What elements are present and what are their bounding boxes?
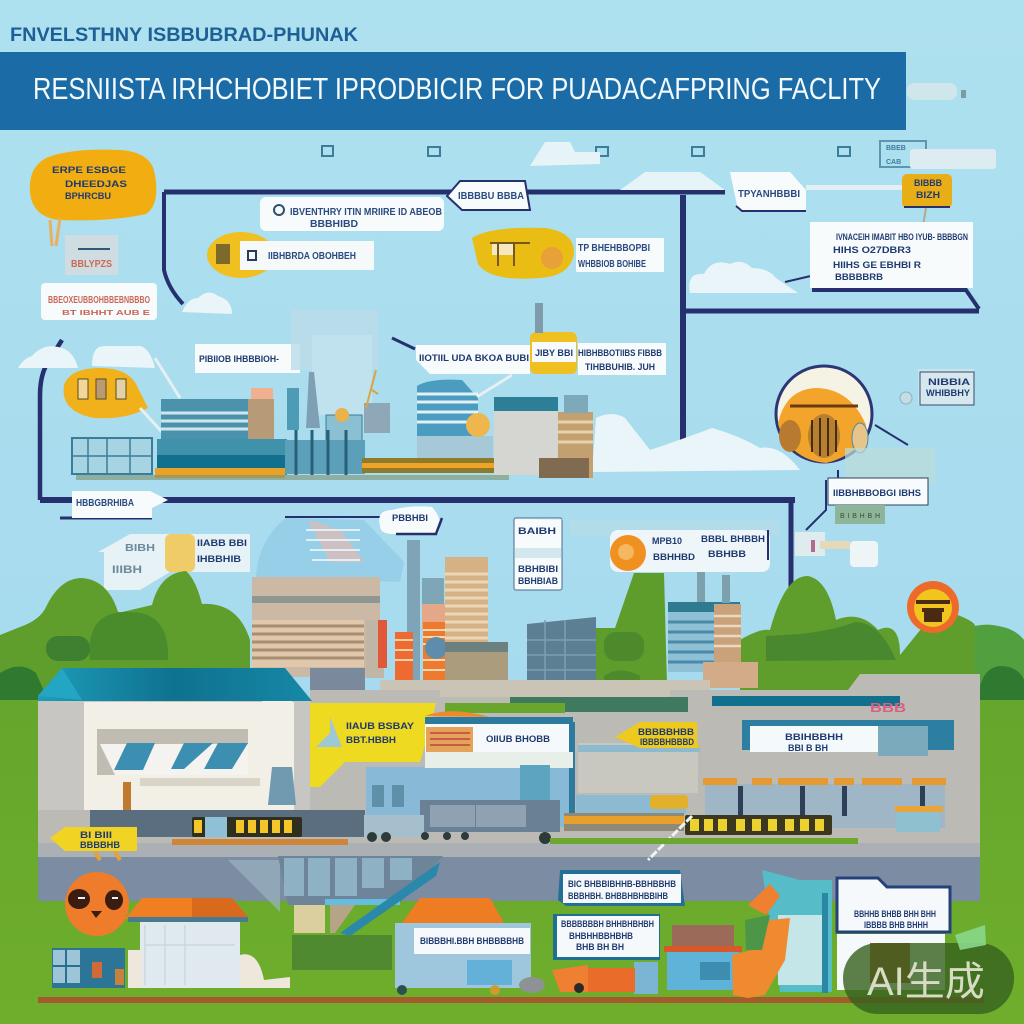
- callout: middle three-part label: TIHBBUHIB. JUH: [585, 362, 655, 372]
- callout: orange icon label: MPB10: [652, 536, 682, 546]
- faded glass dome with stripes: [256, 518, 404, 582]
- note box lower bottom centre: [553, 914, 660, 960]
- green strip below hall: [550, 838, 858, 844]
- diagonal pointers: [140, 358, 512, 432]
- callout: faded yellow label left: IIABB BBI: [197, 538, 247, 548]
- grey bin: [268, 767, 296, 805]
- callout: yellow blob with label: [207, 232, 374, 278]
- middle hall with yellow arrow: BBBBBHBB: [638, 727, 695, 737]
- billboard right hall: BBIHBBHH: [785, 732, 843, 742]
- callout: orange blob top left: ERPE ESBGE: [52, 165, 126, 175]
- blue glass warehouse: [366, 711, 575, 827]
- callout: faded yellow label left: IHBBHIB: [197, 554, 242, 564]
- towers and pipes centre: [285, 370, 390, 475]
- orange truck: [519, 962, 658, 994]
- small kiosk: [895, 806, 943, 812]
- centre blue van house: BIBBBHI.BBH BHBBBBHB: [420, 936, 524, 946]
- watermark text: AI生成: [867, 960, 985, 1004]
- callout: middle three-part label: HIBHBBOTIIBS FIBBB: [578, 348, 662, 358]
- right glass and tan tower: [668, 572, 758, 688]
- ground: [0, 700, 1024, 1024]
- label: factory heading: [195, 344, 300, 373]
- callout: middle three-part label: IIOTIIL UDA BKOA BUBI: [419, 353, 529, 363]
- white folder panel: IBBBB BHB BHHH: [864, 920, 928, 930]
- panel: white note right: HIHS O27DBR3: [833, 245, 911, 255]
- glass enclosure left: [72, 438, 152, 474]
- orange platform: [564, 795, 686, 831]
- yellow callout above train: BBT.HBBH: [346, 735, 396, 745]
- small blue shop: [664, 925, 742, 990]
- icon: orange owl ball: [65, 872, 129, 936]
- chimney top: [535, 303, 543, 333]
- bottom brown ground line: [38, 997, 984, 1003]
- callout: tag right of top line: [730, 172, 806, 211]
- glass blue building: [527, 617, 596, 686]
- note box lower bottom centre: BHBHHBBHBHB: [569, 931, 633, 941]
- colonnade with orange canopies: [703, 778, 946, 832]
- factory base shadow: [76, 475, 509, 480]
- worker figure: [123, 782, 131, 810]
- panel: top right mini card: CAB: [886, 159, 901, 166]
- label: right lower with green plate: BIBHBH: [840, 513, 880, 520]
- solar panels: [114, 743, 248, 770]
- callout: yellow blob with label: IIBHBRDA OBOHBEH: [268, 251, 356, 262]
- icon: sun badge: [907, 581, 959, 633]
- windows recess: [97, 729, 248, 775]
- line above label: [515, 519, 780, 535]
- right tiny card: WHIBBHY: [926, 388, 970, 398]
- label: cloud tag centre: PBBHBI: [392, 513, 428, 523]
- panel: white note right: IVNACEIH IMABIT HBO IYUB- BBBBGN: [836, 232, 968, 242]
- tower pillar: [407, 540, 420, 680]
- yellow callout above train: IIAUB BSBAY: [346, 721, 414, 731]
- panel: white note right: BBBBBRB: [835, 272, 884, 282]
- panel: white note right: HIIHS GE EBHBI R: [833, 260, 922, 270]
- label: arrow tag lower left: HBBGBRHIBA: [76, 498, 134, 509]
- callout: orange icon label: [610, 530, 770, 572]
- cloud band along top connector: [530, 142, 725, 190]
- main plant block: [155, 388, 287, 478]
- panel: white note right: [810, 222, 973, 288]
- callout: orange blob top left: [30, 150, 156, 246]
- flow connector lines: [40, 192, 979, 590]
- factory stack haze: [291, 310, 378, 415]
- yellow arrow sign: [50, 827, 137, 860]
- icon: circular magnifier face: [776, 366, 872, 463]
- label: narrow two-part card: BBHBIBI: [518, 564, 558, 574]
- panel: top right mini card: BBEB: [886, 145, 906, 152]
- label: right lower with green plate: [828, 448, 935, 524]
- callout: arrow tag top centre: [447, 181, 530, 210]
- label: red text box: BBEOXEUBBOHBBEBNBBBO: [48, 295, 150, 306]
- callout: orange icon label: BBHHBD: [653, 552, 696, 562]
- callout: faded yellow label left: BIBH: [125, 543, 155, 554]
- middle hall with yellow arrow: [578, 722, 700, 809]
- lower ledge: [140, 778, 260, 786]
- city skyline: [252, 540, 758, 698]
- billboard right hall: [742, 700, 954, 756]
- orange track strip: [172, 839, 348, 845]
- tiered building: [362, 380, 509, 473]
- callout: faded yellow label left: [98, 534, 250, 590]
- label: narrow two-part card: BBHBIAB: [518, 576, 558, 586]
- panel: top right mini card: [880, 141, 996, 169]
- yellow callout above train: [310, 703, 436, 787]
- white folder panel: BBHHB BHBB BHH BHH: [854, 909, 936, 919]
- watermark pill: [843, 925, 1014, 1014]
- yellow train left: [192, 817, 302, 837]
- road: [38, 843, 980, 901]
- label: narrow two-part card: BAIBH: [518, 526, 556, 536]
- callout: yellow tag: BIZH: [916, 190, 940, 200]
- callout: middle three-part label: JIBY BBI: [535, 348, 573, 358]
- callout: yellow badge centre: WHBBIOB BOHIBE: [578, 259, 646, 270]
- small window icons row: [322, 146, 850, 156]
- clouds: [18, 262, 800, 472]
- note box lower bottom centre: BHB BH BH: [576, 942, 624, 952]
- callout: yellow badge centre: [472, 228, 664, 279]
- small capsule top right: [907, 83, 966, 100]
- billboard right hall: BBB: [870, 700, 906, 715]
- teal tower with orange tree: [732, 870, 832, 998]
- callout: orange blob top left: DHEEDJAS: [65, 179, 127, 189]
- centre blue van house: [395, 898, 531, 995]
- title banner: [0, 52, 906, 130]
- right tan building: [494, 395, 593, 478]
- right tiny card: NIBBIA: [928, 377, 971, 387]
- underpass glass structure: [228, 856, 443, 970]
- small sign board: [65, 235, 118, 275]
- dashed white pointer: [648, 816, 692, 860]
- large tan building: [252, 577, 387, 678]
- roof: [38, 668, 312, 701]
- label: top middle two-line: BBBHIBD: [310, 219, 358, 230]
- note box upper bottom centre: BIC BHBBIBHHB-BBHBBHB: [568, 879, 676, 889]
- label: red text box: [41, 283, 157, 320]
- label: red text box: BT IBHHT AUB E: [62, 310, 150, 317]
- callout: yellow tag: [902, 174, 952, 226]
- rail line wall: [90, 810, 365, 837]
- orange striped towers: [395, 578, 447, 686]
- connector: pale strip to badge: [806, 185, 906, 190]
- callout: faded yellow label left: IIIBH: [112, 564, 142, 576]
- label: top middle two-line: [260, 197, 444, 231]
- callout: yellow blob with worker icons: [64, 368, 148, 418]
- callout: yellow tag: BIBBB: [914, 178, 942, 188]
- sky background: [0, 0, 1024, 720]
- callout: arrow tag top centre: IBBBBU BBBA: [458, 191, 524, 202]
- kicker heading: FNVELSTHNY ISBBUBRAD-PHUNAK: [10, 25, 358, 46]
- label: cloud tag centre: [379, 506, 442, 534]
- billboard right hall: BBI B BH: [788, 743, 828, 753]
- label: top middle two-line: IBVENTHRY ITIN MRIIRE ID ABEOB: [290, 207, 442, 218]
- callout: yellow badge centre: TP BHEHBBOPBI: [578, 243, 650, 254]
- yellow arrow sign: BI BIII: [80, 830, 112, 840]
- grey freight truck: [364, 800, 560, 844]
- white folder panel: [837, 878, 950, 990]
- label: narrow two-part card: [514, 518, 562, 590]
- callout: orange icon label: BBBL BHBBH: [701, 534, 765, 544]
- left bottom house: [125, 898, 290, 988]
- small sign board: BBLYPZS: [71, 259, 112, 270]
- left bottom kiosk: [52, 948, 125, 988]
- main warehouse building: [38, 668, 365, 837]
- right tiny card: [900, 369, 974, 405]
- middle hall with yellow arrow: IBBBBHBBBD: [640, 737, 694, 747]
- label: right lower with green plate: IIBBHBBOBGI IBHS: [833, 488, 921, 498]
- label: factory heading: PIBIIOB IHBBBIOH-: [199, 354, 279, 364]
- callout: tag right of top line: TPYANHBBBI: [738, 189, 800, 200]
- note box lower bottom centre: BBBBBBBH BHHBHBHBH: [561, 919, 654, 929]
- note box upper bottom centre: BBBHBH. BHBBHBHBBIHB: [568, 891, 668, 901]
- street crowd strip: [310, 668, 710, 698]
- note box upper bottom centre: [558, 870, 685, 906]
- tan striped tower: [445, 557, 508, 682]
- wall: [38, 696, 310, 810]
- connector device right: [795, 480, 878, 567]
- long yellow train: [685, 815, 832, 835]
- plant slab: [38, 674, 980, 860]
- blue glass warehouse: OIIUB BHOBB: [486, 734, 551, 744]
- callout: orange icon label: BBHBB: [708, 549, 747, 559]
- yellow arrow sign: BBBBHB: [80, 840, 121, 850]
- background hills: [0, 571, 1024, 700]
- callout: middle three-part label: [416, 332, 666, 375]
- callout: orange blob top left: BPHRCBU: [65, 191, 111, 201]
- factory complex: [72, 370, 593, 480]
- label: arrow tag lower left: [72, 491, 168, 518]
